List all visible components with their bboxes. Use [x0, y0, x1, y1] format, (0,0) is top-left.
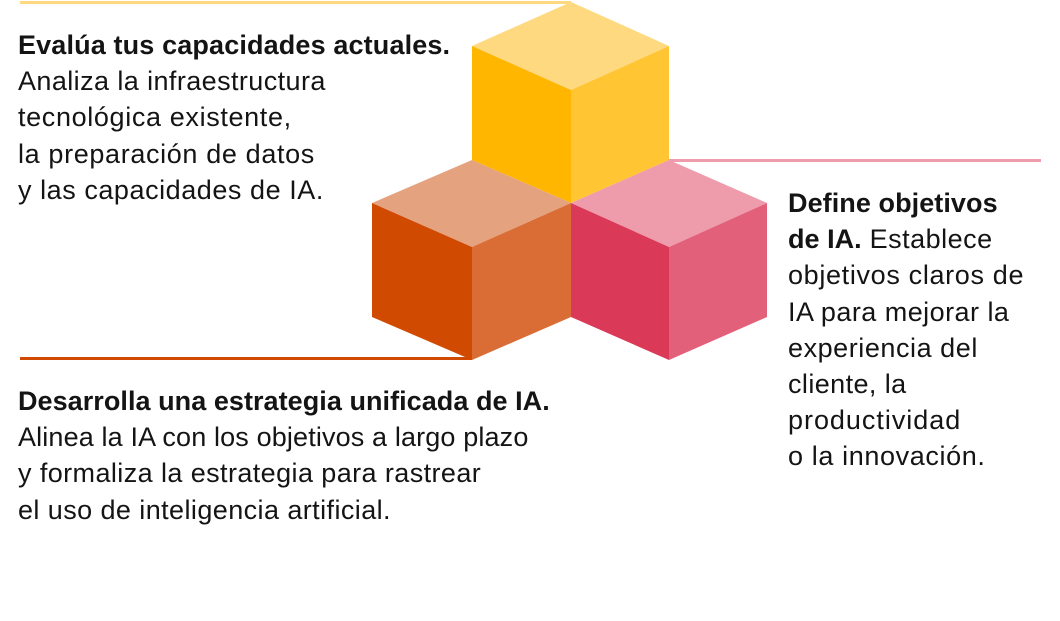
- connector line: pink: [669, 159, 1041, 162]
- text block: objetivos de IA: productividad: [788, 405, 961, 435]
- connector line: orange: [20, 357, 472, 360]
- text block: objetivos de IA: experiencia del: [788, 333, 978, 363]
- cube: orange: [372, 160, 571, 360]
- text block: capacidades actuales: Analiza la infraestructura: [18, 66, 326, 96]
- text block: capacidades actuales: y las capacidades de IA.: [18, 175, 324, 205]
- text block: capacidades actuales: tecnológica existente,: [18, 102, 292, 132]
- text block: estrategia unificada: [18, 386, 550, 525]
- text block: objetivos de IA: IA para mejorar la: [788, 297, 1009, 327]
- text block: objetivos de IA: cliente, la: [788, 369, 907, 399]
- text block: objetivos de IA: [788, 188, 1024, 471]
- text block: estrategia unificada: y formaliza la estrategia para rastrear: [18, 458, 481, 488]
- text block: estrategia unificada: Alinea la IA con los objetivos a largo plazo: [18, 422, 528, 452]
- text block: objetivos de IA: Define objetivos: [788, 188, 998, 218]
- connector line: yellow: [20, 1, 571, 4]
- cube: pink: [571, 160, 767, 360]
- text block: estrategia unificada: Desarrolla una estrategia unificada de IA.: [18, 386, 550, 416]
- text block: objetivos de IA: de IA. Establece: [788, 224, 993, 254]
- text block: capacidades actuales: Evalúa tus capacidades actuales.: [18, 30, 450, 60]
- text block: capacidades actuales: [18, 30, 450, 205]
- text block: objetivos de IA: o la innovación.: [788, 441, 986, 471]
- text block: capacidades actuales: la preparación de datos: [18, 139, 315, 169]
- text block: objetivos de IA: objetivos claros de: [788, 260, 1024, 290]
- text block: estrategia unificada: el uso de inteligencia artificial.: [18, 495, 391, 525]
- cube: yellow: [472, 2, 669, 203]
